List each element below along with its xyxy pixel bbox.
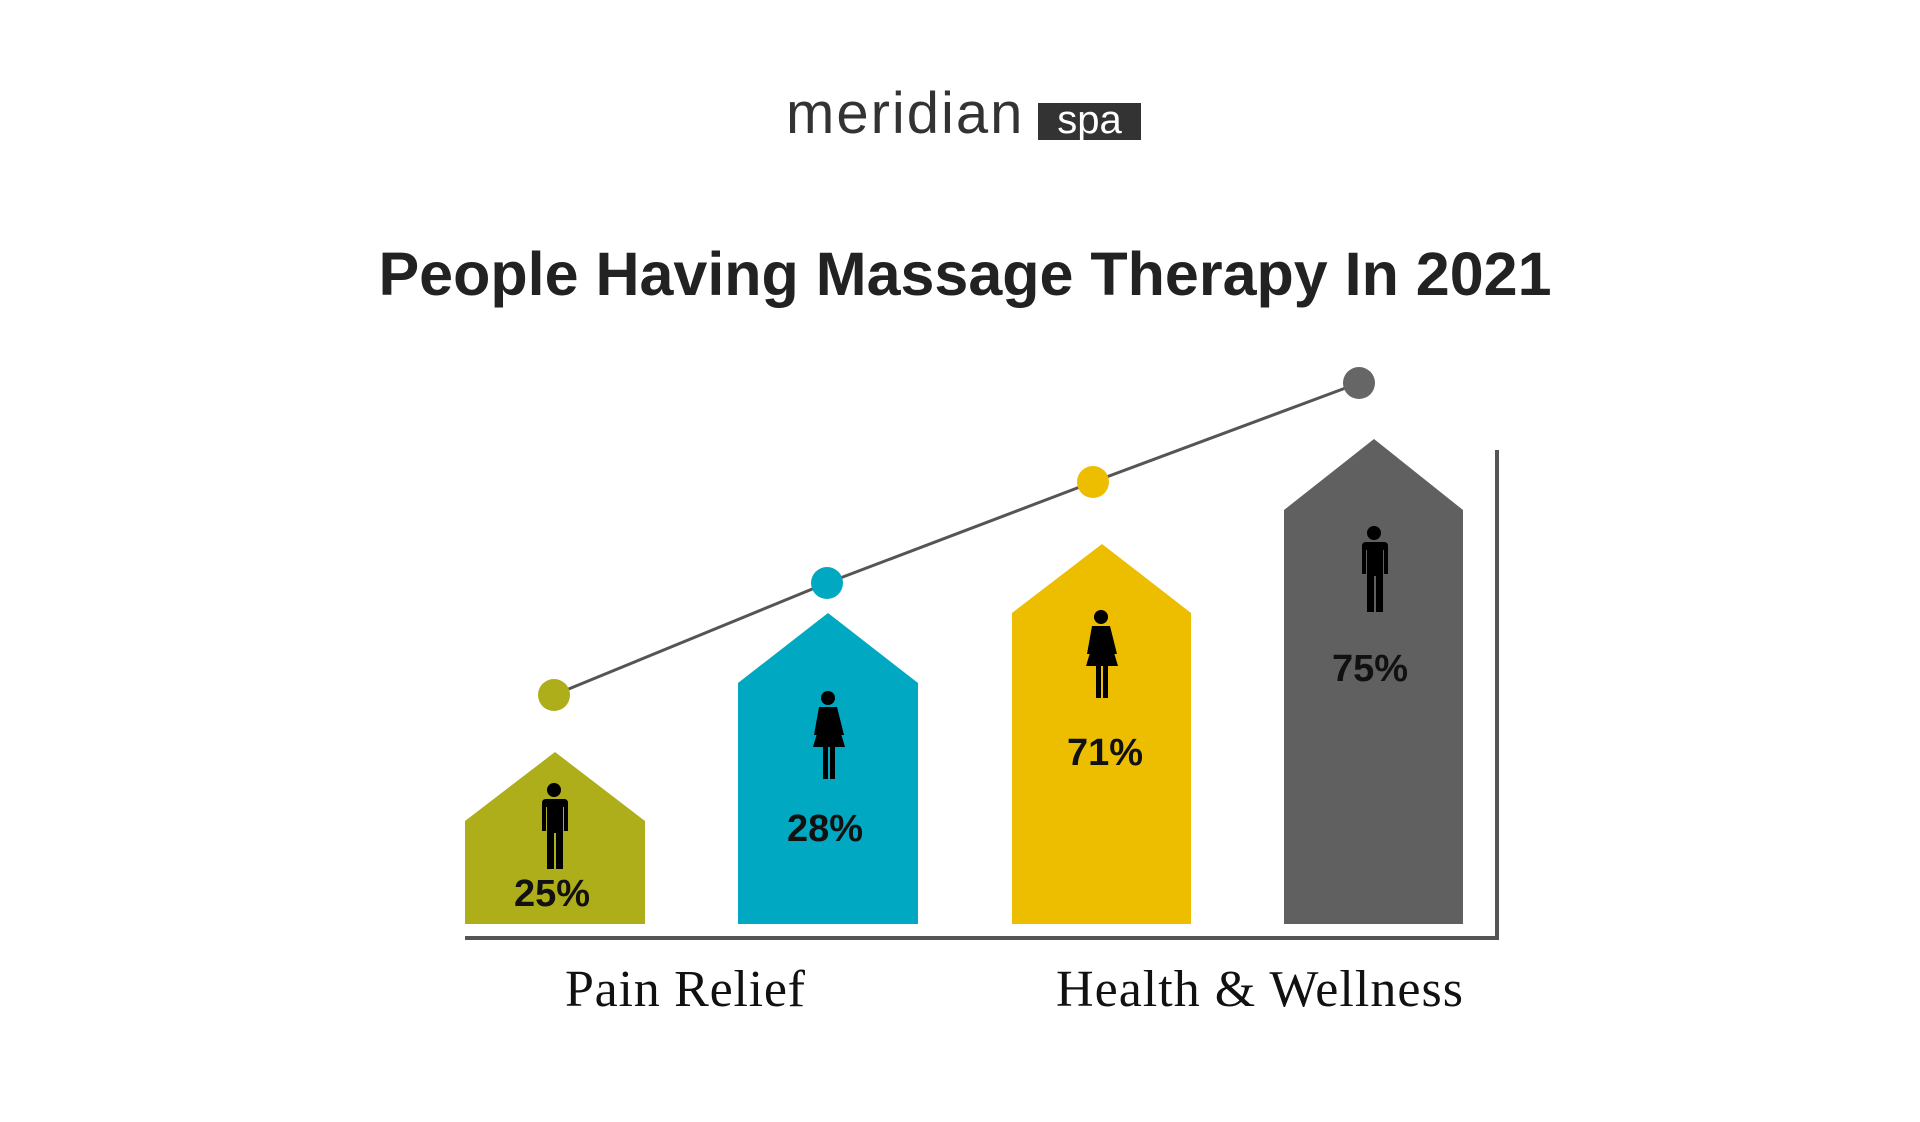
bar: 25%	[465, 752, 645, 924]
icon: man	[542, 783, 568, 869]
label: Pain Relief: Pain Relief	[565, 961, 806, 1018]
icon: woman	[1086, 610, 1118, 698]
axis	[465, 450, 1497, 938]
bar: 71%	[1012, 544, 1191, 924]
value 75%: 75%	[1332, 648, 1408, 690]
icon: man	[1362, 526, 1388, 612]
icon: woman	[813, 691, 845, 779]
dot: 25%	[538, 679, 570, 711]
dot: 28%	[811, 567, 843, 599]
bar: 28%	[738, 613, 918, 924]
trend line	[554, 383, 1359, 695]
logo wordmark: meridian	[786, 81, 1024, 146]
logo	[786, 81, 1141, 146]
logo spa box	[1038, 103, 1141, 140]
bar: 75%	[1284, 439, 1463, 924]
label: Health & Wellness: Health & Wellness	[1056, 961, 1463, 1018]
dot: 75%	[1343, 367, 1375, 399]
value 25%: 25%	[514, 873, 590, 915]
logo spa box: spa	[1057, 98, 1122, 142]
title: People Having Massage Therapy In 2021	[378, 240, 1552, 308]
value 71%: 71%	[1067, 732, 1143, 774]
value 28%: 28%	[787, 808, 863, 850]
dot: 71%	[1077, 466, 1109, 498]
